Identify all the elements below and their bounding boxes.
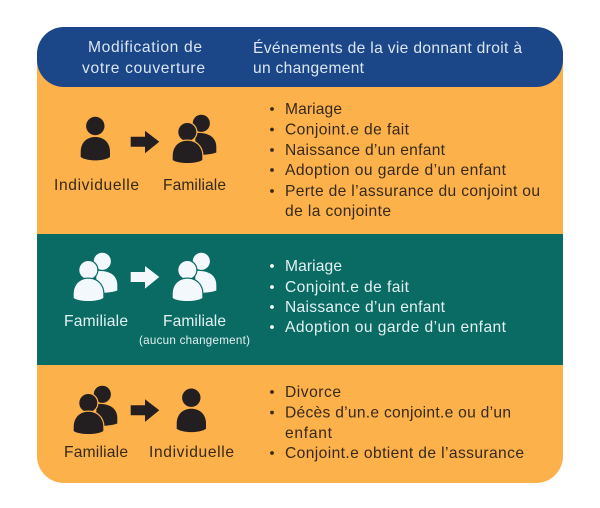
list: events row 3: enfant [285,425,333,442]
list: events row 1: de la conjointe [285,203,391,220]
panel: background card [37,50,563,483]
row 2: family to family [64,253,507,347]
list: events row 3: Décès d’un.e conjoint.e ou d’un [285,404,511,422]
label: Familiale: Familiale [64,313,128,330]
header band [37,27,563,87]
label: Familiale: Familiale [163,177,226,194]
list: events row 1: Perte de l’assurance du conjoint ou [285,183,540,200]
label: Familiale: Familiale [64,444,128,461]
label: Familiale: Familiale [163,313,226,330]
heading: life events: Événements de la vie donnant droit à [253,38,522,57]
row 3: family to individual [64,384,524,462]
icon: single person [81,117,110,160]
icon: family [74,253,117,301]
list: events row 1: Mariage [285,101,342,118]
list: events row 1: Conjoint.e de fait [285,122,410,138]
heading: coverage change: Modification de [88,39,202,56]
list: events row 3: Divorce [285,384,341,401]
label: Individuelle: Individuelle [54,177,139,194]
label: Individuelle: Individuelle [149,444,234,461]
list: events row 2: Conjoint.e de fait [285,279,410,296]
list: events row 2: Mariage [285,258,342,275]
list: events row 3 [270,384,524,462]
list: events row 2: Adoption ou garde d’un enfant [285,319,507,336]
list: events row 2 [270,258,507,336]
list: events row 1: Naissance d’un enfant [285,142,446,159]
list: events row 2: Naissance d’un enfant [285,299,446,316]
heading: life events: un changement [253,60,365,77]
icon: single person [177,388,206,432]
panel: teal row [37,234,563,365]
arrow [131,131,159,153]
list: events row 1: Adoption ou garde d’un enfant [285,162,507,179]
arrow [131,266,159,289]
list: events row 1 [270,101,540,220]
list: events row 3: Conjoint.e obtient de l’assurance [285,445,524,462]
heading: coverage change: votre couverture [82,60,205,77]
heading: life events [253,38,522,77]
icon: family [173,115,216,163]
heading: coverage change [82,39,205,77]
icon: family [173,253,216,301]
row 1: individual to family [54,101,540,220]
icon: family [74,386,117,434]
note: no change: (aucun changement) [139,334,250,347]
arrow [131,399,159,422]
